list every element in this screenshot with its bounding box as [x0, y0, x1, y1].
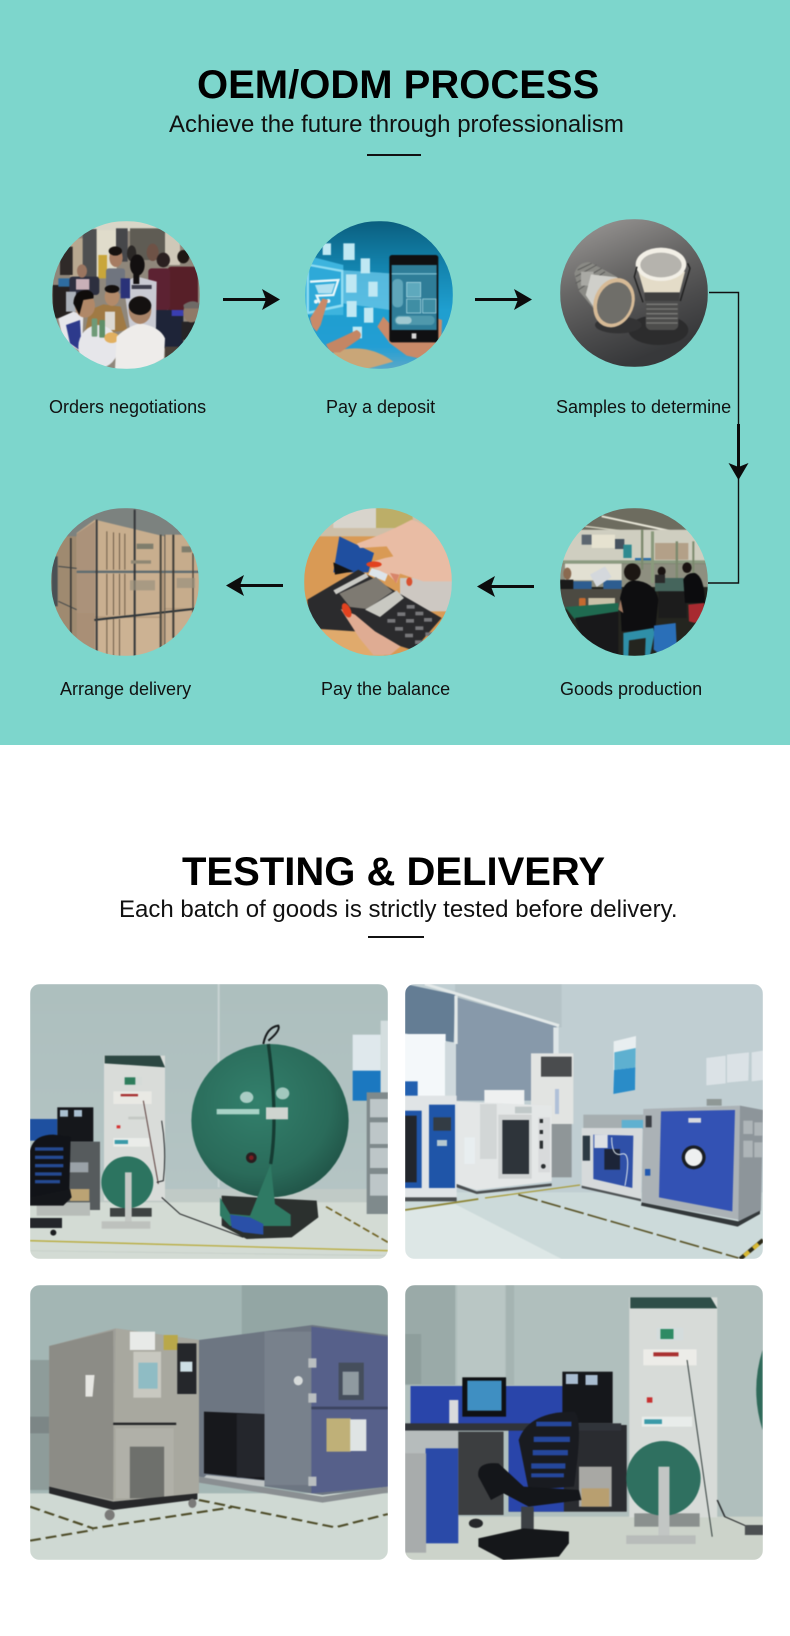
photo: pay the balance	[304, 508, 452, 656]
arrow: step 2 to 3	[475, 289, 532, 310]
label: arrange delivery: Arrange delivery	[60, 679, 191, 699]
photo: photometer workstation	[405, 1285, 763, 1560]
photo: orders negotiations	[52, 221, 200, 369]
label: samples to determine: Samples to determine	[556, 397, 731, 417]
photo: environmental chambers room	[405, 984, 763, 1259]
label: orders negotiations: Orders negotiations	[49, 397, 206, 417]
panel: testing and delivery	[30, 850, 763, 1560]
label: goods production: Goods production	[560, 679, 702, 699]
title: OEM/ODM process: OEM/ODM PROCESS	[197, 63, 599, 107]
title: testing and delivery: TESTING & DELIVERY	[182, 850, 605, 894]
photo: integrating sphere lab	[30, 984, 388, 1259]
label: pay the balance: Pay the balance	[321, 679, 450, 699]
arrow: step 1 to 2	[223, 289, 280, 310]
photo: climate test chambers	[30, 1285, 388, 1560]
panel: OEM/ODM process	[0, 0, 790, 745]
photo: pay a deposit	[305, 221, 453, 369]
photo: goods production	[560, 508, 708, 656]
arrow: step 5 to 6	[226, 575, 283, 596]
label: pay a deposit: Pay a deposit	[326, 397, 435, 417]
photo: arrange delivery	[51, 508, 199, 656]
arrow: step 6 to 5	[477, 576, 534, 597]
subtitle: testing: Each batch of goods is strictly tested before delivery.	[119, 896, 678, 923]
arrow: connector from samples to goods production	[708, 292, 748, 584]
photo: samples	[560, 219, 708, 367]
subtitle: process: Achieve the future through professionalism	[169, 111, 624, 138]
